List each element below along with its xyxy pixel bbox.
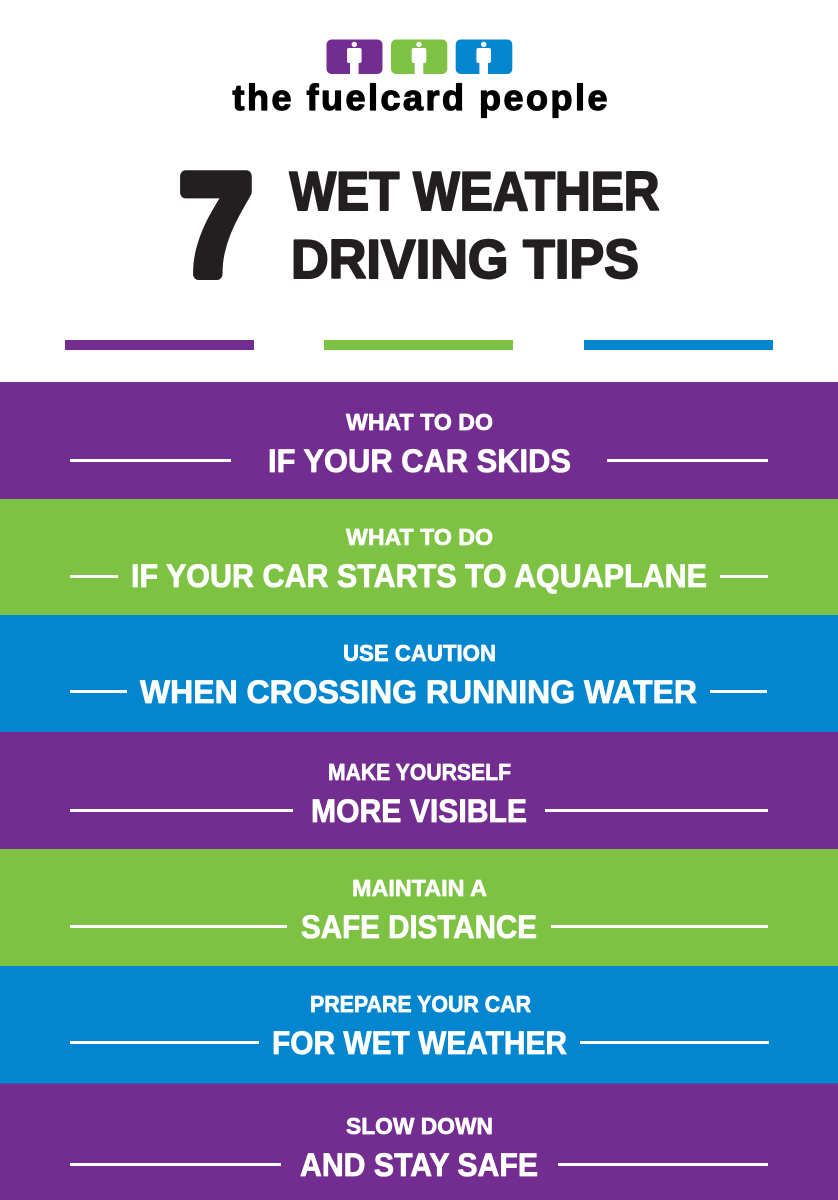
panel: tip 7 [0,1084,838,1200]
tip 4 kicker: MAKE YOURSELF [328,759,511,785]
tip 4 heading: MORE VISIBLE [311,793,527,829]
tip 5 kicker: MAINTAIN A [352,875,487,901]
panel: tip 2 [0,499,838,615]
tip 7 kicker: SLOW DOWN [346,1113,493,1139]
tip 1 kicker: WHAT TO DO [346,409,493,435]
tip 2 kicker: WHAT TO DO [346,524,493,550]
tip 6 heading: FOR WET WEATHER [272,1025,567,1061]
tip 1 heading: IF YOUR CAR SKIDS [268,443,571,479]
heading line 1: WET WEATHER [290,160,660,222]
tip 5 heading: SAFE DISTANCE [301,909,537,945]
tip 7 heading: AND STAY SAFE [300,1147,538,1183]
icon: blue person card [456,40,512,74]
panel: tip 1 [0,382,838,499]
tip 3 heading: WHEN CROSSING RUNNING WATER [140,674,697,710]
heading line 2: DRIVING TIPS [291,228,639,290]
icon: green person card [391,40,447,74]
logo wordmark: the fuelcard people [232,77,608,118]
tip 2 heading: IF YOUR CAR STARTS TO AQUAPLANE [131,558,707,594]
title [180,146,660,305]
logo: the fuelcard people [232,40,608,118]
panel: tip 5 [0,849,838,966]
colour divider bars [65,340,773,350]
tip 6 kicker: PREPARE YOUR CAR [310,991,531,1017]
tip 3 kicker: USE CAUTION [343,640,496,666]
panel: tip 3 [0,615,838,732]
big numeral 7: 7 [180,146,252,305]
panel: tip 4 [0,732,838,849]
icon: purple person card [326,40,382,74]
panel: tip 6 [0,966,838,1084]
